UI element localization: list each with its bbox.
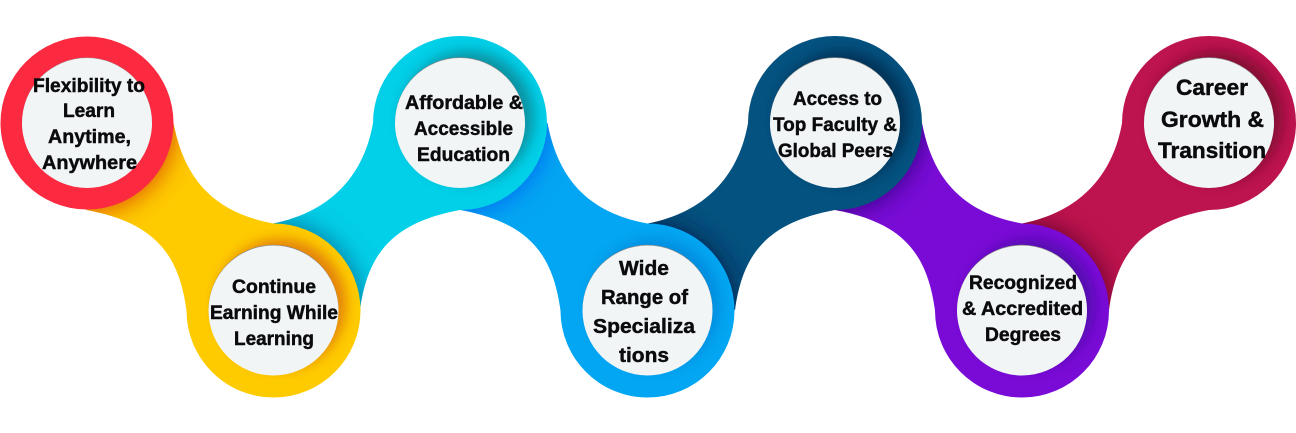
label: access to faculty: Global Peers	[778, 141, 893, 162]
label: career growth: Transition	[1158, 138, 1266, 163]
label: continue earning: Learning	[234, 329, 314, 350]
label: flexibility	[33, 76, 145, 174]
label: recognized degrees: Degrees	[985, 325, 1061, 346]
label: recognized degrees: & Accredited	[962, 299, 1083, 320]
label: flexibility: Anywhere	[42, 153, 137, 174]
label: affordable education: Affordable &	[405, 93, 523, 114]
label: wide range of specializations: Range of	[601, 286, 688, 309]
node 2: continue earning	[86, 123, 360, 398]
label: career growth: Growth &	[1161, 107, 1264, 132]
label: career growth: Career	[1176, 75, 1248, 100]
label: continue earning: Earning While	[210, 303, 338, 324]
label: flexibility: Learn	[63, 101, 115, 122]
node 7: career growth	[1022, 36, 1296, 310]
label: wide range of specializations: tions	[619, 344, 669, 367]
label: wide range of specializations: Specializa	[593, 315, 696, 338]
node 4: wide range of specializations	[460, 123, 734, 398]
label: affordable education	[405, 93, 523, 166]
label: continue earning	[210, 277, 338, 350]
label: career growth	[1158, 75, 1266, 163]
node 5: access to faculty	[648, 36, 922, 310]
label: flexibility: Anytime,	[48, 127, 131, 148]
label: affordable education: Education	[417, 145, 510, 166]
node 6: recognized degrees	[835, 123, 1109, 398]
node 3: affordable education	[273, 36, 547, 310]
label: flexibility: Flexibility to	[33, 76, 145, 97]
label: affordable education: Accessible	[414, 119, 513, 140]
label: wide range of specializations	[593, 257, 696, 367]
node 1: flexibility	[0, 36, 174, 210]
label: access to faculty	[773, 89, 897, 162]
label: access to faculty: Top Faculty &	[773, 115, 897, 136]
label: wide range of specializations: Wide	[619, 257, 669, 280]
label: continue earning: Continue	[232, 277, 316, 298]
label: recognized degrees: Recognized	[969, 273, 1077, 294]
label: recognized degrees	[962, 273, 1083, 346]
label: access to faculty: Access to	[793, 89, 882, 110]
